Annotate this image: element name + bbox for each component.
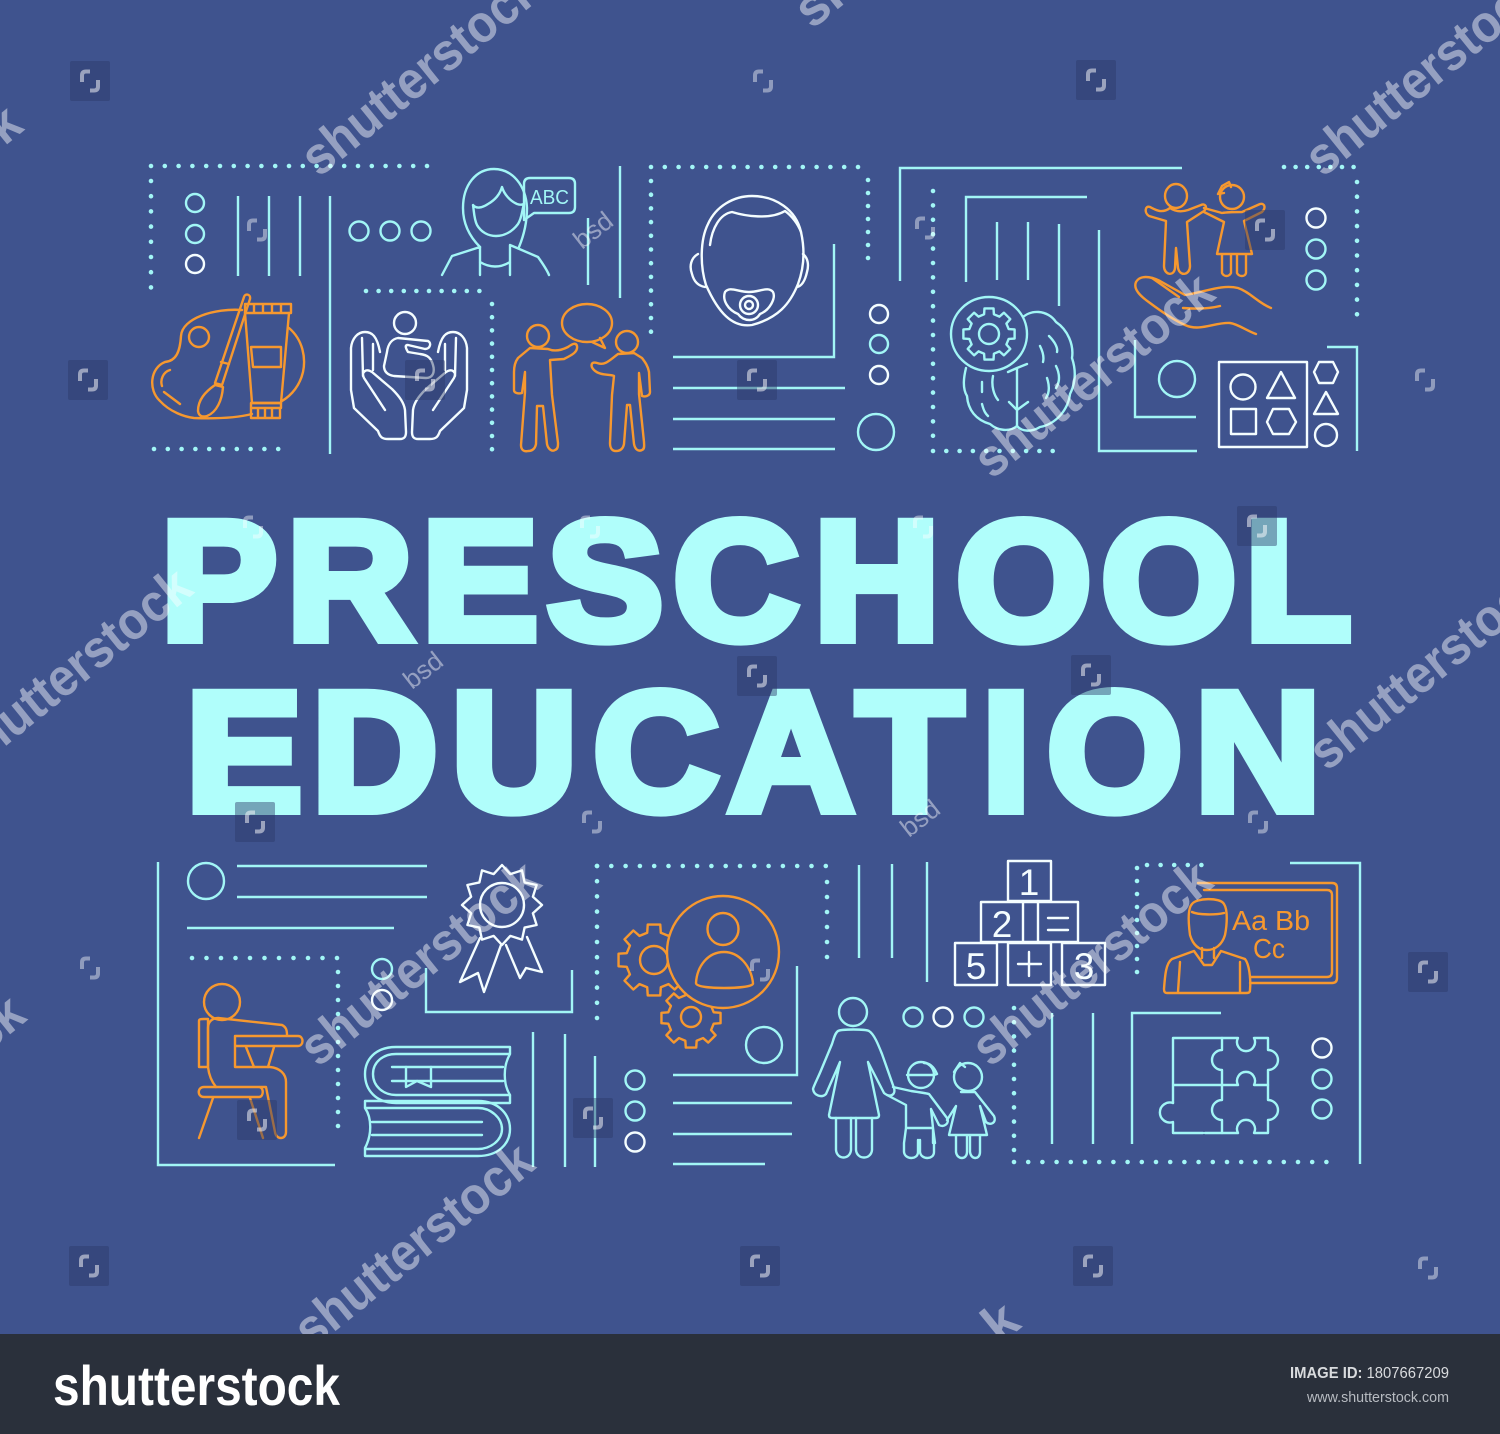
icon: teacher at chalkboard: Aa Bb bbox=[1232, 905, 1310, 936]
icon: stack of books bbox=[365, 1047, 510, 1156]
icon: pupil sitting at desk bbox=[199, 984, 302, 1138]
icon: jigsaw puzzle bbox=[1160, 1038, 1278, 1133]
footer bar bbox=[0, 1334, 1500, 1434]
icon: brain with gear bbox=[951, 297, 1075, 431]
footer logo: shutterstock bbox=[53, 1354, 341, 1417]
title: EDUCATION bbox=[186, 658, 1321, 846]
icon: woman speaking ABC bbox=[442, 169, 575, 275]
icon: child held in two hands bbox=[351, 312, 467, 439]
watermark: shutterstock diagonal text: bsd bbox=[397, 645, 449, 695]
image id: IMAGE ID: 1807667209 bbox=[1290, 1365, 1449, 1382]
site url: www.shutterstock.com bbox=[1306, 1390, 1449, 1406]
icon: number blocks: 1 bbox=[1019, 862, 1039, 903]
title bbox=[161, 487, 1351, 846]
watermark: shutterstock diagonal text: shutterstock bbox=[288, 849, 551, 1077]
icon: baby with pacifier bbox=[691, 196, 808, 325]
icon: two people talking bbox=[514, 304, 650, 451]
icon: person with gears bbox=[619, 896, 779, 1048]
icon: children above a hand bbox=[1135, 182, 1271, 334]
icon: shape sorter board bbox=[1219, 362, 1338, 447]
watermark: shutterstock diagonal text: shutterstock bbox=[962, 261, 1225, 489]
watermark: shutterstock diagonal text: shutterstock bbox=[282, 1131, 545, 1359]
icon: teacher at chalkboard bbox=[1164, 883, 1337, 993]
icon: award ribbon rosette bbox=[460, 865, 542, 992]
panel: bottom decorative frames bbox=[158, 862, 1360, 1167]
watermark: shutterstock diagonal text: bsd bbox=[894, 793, 946, 843]
icon: number blocks: 3 bbox=[1074, 946, 1094, 987]
icon: number blocks: 2 bbox=[992, 904, 1012, 945]
icon: woman speaking ABC: ABC bbox=[530, 187, 569, 209]
panel: top decorative frames bbox=[151, 166, 1357, 454]
icon: mother with two children bbox=[813, 998, 995, 1158]
icon: number blocks: 5 bbox=[966, 946, 986, 987]
watermark: shutterstock diagonal text: shutterstock bbox=[960, 849, 1223, 1077]
icon: number blocks bbox=[955, 861, 1105, 987]
watermark: shutterstock diagonal text: bsd bbox=[567, 205, 619, 255]
watermark: shutterstock diagonal text: k bbox=[970, 1290, 1031, 1354]
watermark: square logo marks bbox=[68, 60, 1448, 1286]
icon: teacher at chalkboard: Cc bbox=[1253, 933, 1285, 964]
icon: palette, brush and paint tube bbox=[152, 295, 304, 418]
title: PRESCHOOL bbox=[161, 487, 1351, 675]
